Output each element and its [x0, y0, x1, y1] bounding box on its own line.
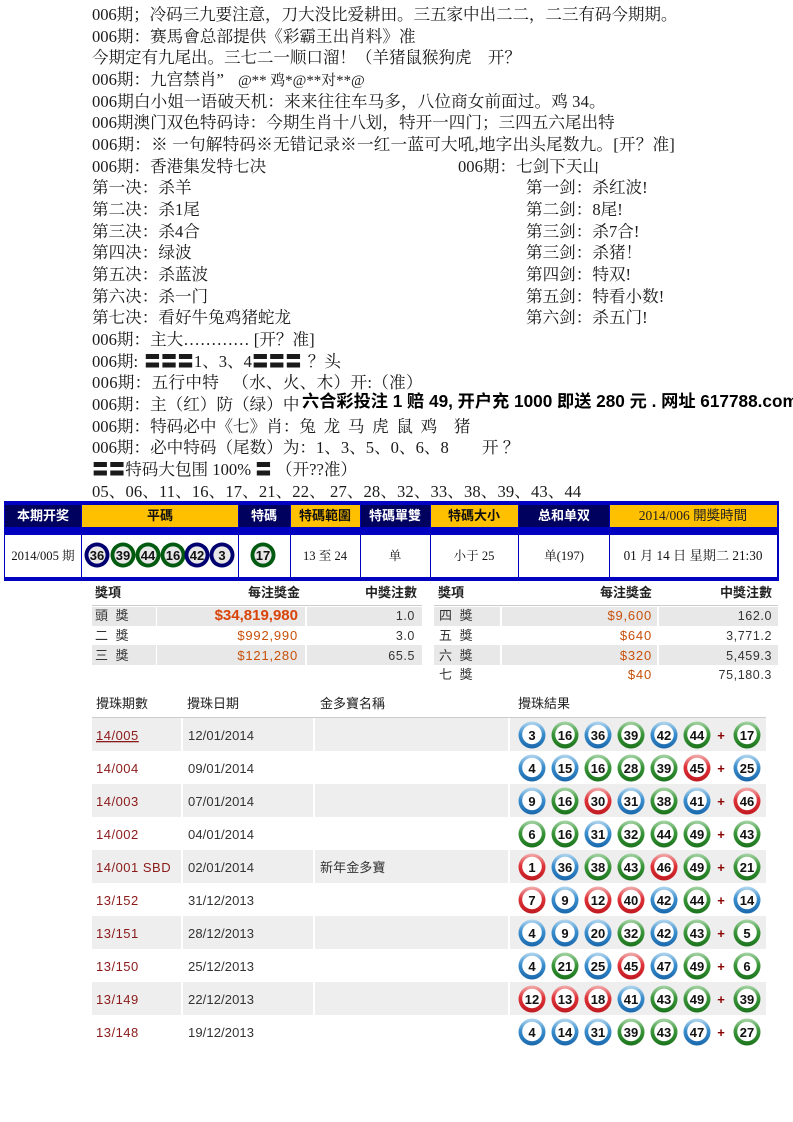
prize table left: 中獎注數 — [365, 585, 417, 600]
row 14/002: + — [717, 827, 725, 842]
row 14/001 SBD: 1 — [528, 860, 536, 875]
row 14/001 SBD: 21 — [740, 860, 754, 875]
row 13/151: 32 — [624, 926, 638, 941]
prize table right: 162.0 — [738, 609, 772, 623]
forecast text block — [92, 5, 677, 501]
row 14/002: 6 — [528, 827, 536, 842]
winning balls — [84, 542, 234, 568]
prize table left: 1.0 — [396, 609, 415, 623]
row 14/001 SBD: 49 — [690, 860, 704, 875]
row 13/149: 22/12/2013 — [188, 992, 254, 1007]
row 13/152: 7 — [528, 893, 536, 908]
prize table right: 五 獎 — [439, 628, 475, 643]
row 13/152: 40 — [624, 893, 638, 908]
prize table right: 5,459.3 — [726, 649, 772, 663]
prize table right: 每注獎金 — [600, 585, 652, 600]
row 14/005: 3 — [528, 728, 536, 743]
row 14/004: 4 — [528, 761, 536, 776]
prize table right: $9,600 — [607, 608, 652, 623]
draw results table — [4, 501, 779, 581]
history header: 攪珠日期 — [187, 696, 239, 711]
row 14/003: 46 — [740, 794, 754, 809]
prize table left — [92, 585, 422, 665]
row 13/151: 28/12/2013 — [188, 926, 254, 941]
forecast text block: 006期：主大………… [开？准] — [92, 330, 315, 349]
row 14/002: 44 — [657, 827, 672, 842]
row 14/002: 49 — [690, 827, 704, 842]
forecast text block: 第四剑：特双! — [526, 265, 631, 284]
row 14/004: 25 — [740, 761, 754, 776]
forecast text block: 第七决：看好牛兔鸡猪蛇龙 — [92, 308, 291, 327]
row 13/148: 43 — [657, 1025, 671, 1040]
row 13/152 — [96, 886, 760, 914]
table header row: 本期开奖 — [17, 505, 69, 524]
forecast text block: 006期澳门双色特码诗：今期生肖十八划，特开一四门；三四五六尾出特 — [92, 113, 615, 132]
prize table left: 3.0 — [396, 629, 415, 643]
prize table left: $121,280 — [237, 648, 298, 663]
row 13/151: 13/151 — [96, 926, 139, 941]
row 14/001 SBD: 36 — [558, 860, 572, 875]
row 14/005: 36 — [591, 728, 605, 743]
history header: 攪珠結果 — [518, 696, 570, 711]
row 14/004: 39 — [657, 761, 671, 776]
row 13/152: 42 — [657, 893, 671, 908]
row 13/150: 49 — [690, 959, 704, 974]
row 14/004: + — [717, 761, 725, 776]
row 14/003 — [96, 788, 760, 814]
forecast text block: 006期白小姐一语破天机：来来往往车马多，八位商女前面过。鸡 34。 — [92, 92, 606, 111]
forecast text block: 第三剑：杀猪！ — [526, 243, 642, 262]
forecast text block: 今期定有九尾出。三七二一顺口溜！（羊猪鼠猴狗虎 开？ — [92, 48, 521, 67]
row 14/004: 09/01/2014 — [188, 761, 254, 776]
prize table left: 頭 獎 — [95, 608, 131, 623]
row 14/003: 07/01/2014 — [188, 794, 254, 809]
forecast text block: 006期: 〓〓〓1、3、4〓〓〓 ？头 — [92, 352, 341, 371]
row 14/001 SBD: + — [717, 860, 725, 875]
forecast text block: 006期：九宫禁肖” @** 鸡*@**对**@ — [92, 70, 365, 89]
row 13/148: 39 — [624, 1025, 638, 1040]
row 14/004: 16 — [591, 761, 605, 776]
row 13/151: 20 — [591, 926, 605, 941]
row 13/148: 14 — [558, 1025, 573, 1040]
row 13/150: 4 — [528, 959, 536, 974]
row 13/152: + — [717, 893, 725, 908]
row 14/003: 30 — [591, 794, 605, 809]
row 13/150: + — [717, 959, 725, 974]
history header — [92, 696, 766, 718]
table header row — [5, 505, 777, 527]
table data row: 单 — [389, 549, 402, 563]
row 14/005: 14/005 — [96, 728, 139, 743]
row 13/152: 12 — [591, 893, 605, 908]
row 14/003: 31 — [624, 794, 638, 809]
row 13/149: 41 — [624, 992, 638, 1007]
row 13/151: 43 — [690, 926, 704, 941]
table header row: 总和单双 — [538, 505, 590, 524]
forecast text block: 006期：五行中特 （水、火、木）开:（准） — [92, 373, 423, 392]
row 13/150: 45 — [624, 959, 638, 974]
row 14/003: 9 — [528, 794, 536, 809]
row 13/150: 6 — [743, 959, 751, 974]
row 13/150: 25/12/2013 — [188, 959, 254, 974]
forecast text block: 第三剑：杀7合! — [526, 222, 639, 241]
row 13/148 — [96, 1018, 760, 1046]
row 14/004: 14/004 — [96, 761, 139, 776]
forecast text block: 第六决：杀一门 — [92, 287, 208, 306]
row 13/149: + — [717, 992, 725, 1007]
row 14/004: 45 — [690, 761, 704, 776]
row 14/005: 44 — [690, 728, 705, 743]
row 14/003: + — [717, 794, 725, 809]
forecast text block: 第四决：绿波 — [92, 243, 192, 262]
row 14/005: 17 — [740, 728, 754, 743]
prize table right: $40 — [628, 667, 652, 682]
row 14/005: 16 — [558, 728, 572, 743]
prize table left: 二 獎 — [95, 628, 131, 643]
forecast text block: 〓〓特码大包围 100% 〓 （开??准） — [92, 460, 357, 479]
row 13/152: 44 — [690, 893, 705, 908]
row 13/151: 42 — [657, 926, 671, 941]
table header row: 特碼大小 — [448, 505, 500, 524]
row 14/001 SBD: 14/001 SBD — [96, 860, 171, 875]
special ball: 17 — [256, 548, 270, 563]
table data row: 小于 25 — [454, 549, 494, 563]
prize table right — [434, 585, 778, 682]
row 13/152: 9 — [561, 893, 569, 908]
prize table left: 三 獎 — [95, 648, 131, 663]
forecast text block: 006期；冷码三九要注意，刀大没比爱耕田。三五家中出二二，二三有码今期期。 — [92, 5, 677, 24]
row 14/003: 16 — [558, 794, 572, 809]
row 14/005 — [96, 722, 760, 748]
table header row: 平碼 — [147, 505, 173, 524]
row 14/002: 16 — [558, 827, 572, 842]
row 13/149: 39 — [740, 992, 754, 1007]
prize table right: 六 獎 — [439, 648, 475, 663]
row 14/002: 43 — [740, 827, 754, 842]
row 14/005: 39 — [624, 728, 638, 743]
row 14/001 SBD: 新年金多寶 — [320, 860, 386, 875]
table header row: 特碼單雙 — [369, 505, 421, 524]
winning balls: 16 — [166, 548, 180, 563]
table data row: 2014/005 期 — [11, 549, 75, 563]
forecast text block: 第五决：杀蓝波 — [92, 265, 208, 284]
row 14/001 SBD: 38 — [591, 860, 605, 875]
row 13/150 — [96, 952, 760, 980]
forecast text block: 006期：必中特码（尾数）为：1、3、5、0、6、8 开 ？ — [92, 438, 519, 457]
row 13/149: 13 — [558, 992, 572, 1007]
forecast text block: 006期：特码必中《七》肖：兔 龙 马 虎 鼠 鸡 猪 — [92, 417, 470, 436]
prize table right: $640 — [620, 628, 652, 643]
table header row: 特碼 — [251, 505, 277, 524]
row 13/150: 13/150 — [96, 959, 139, 974]
winning balls: 44 — [141, 548, 156, 563]
row 14/004: 15 — [558, 761, 572, 776]
forecast text block: 第二决：杀1尾 — [92, 200, 200, 219]
draw history table — [92, 696, 766, 1046]
forecast text block: 006期：七剑下天山 — [458, 157, 599, 176]
row 13/149: 18 — [591, 992, 605, 1007]
table data row: 01 月 14 日 星期二 21:30 — [624, 548, 763, 563]
forecast text block: 第六剑：杀五门! — [526, 308, 648, 327]
prize table right: 七 獎 — [439, 667, 475, 682]
row 14/002: 31 — [591, 827, 605, 842]
table data row: 13 至 24 — [303, 549, 348, 563]
row 13/148: 4 — [528, 1025, 536, 1040]
row 14/001 SBD: 43 — [624, 860, 638, 875]
row 13/151 — [96, 920, 760, 946]
row 13/151: 9 — [561, 926, 569, 941]
forecast text block: 第二剑：8尾! — [526, 200, 623, 219]
table header row: 特碼範圍 — [299, 505, 351, 524]
prize table left: 獎項 — [95, 585, 121, 600]
forecast text block: 006期：香港集发特七决 — [92, 157, 266, 176]
row 14/005: + — [717, 728, 725, 743]
prize table right: 3,771.2 — [726, 629, 772, 643]
winning balls: 42 — [190, 548, 204, 563]
row 14/002: 04/01/2014 — [188, 827, 254, 842]
history header: 攪珠期數 — [96, 696, 148, 711]
prize table left: 65.5 — [388, 649, 415, 663]
row 13/148: 47 — [690, 1025, 704, 1040]
prize table right: 獎項 — [438, 585, 464, 600]
row 14/002: 14/002 — [96, 827, 139, 842]
row 13/150: 21 — [558, 959, 572, 974]
row 13/152: 13/152 — [96, 893, 139, 908]
row 14/003: 38 — [657, 794, 671, 809]
row 13/148: + — [717, 1025, 725, 1040]
prize table left: $34,819,980 — [215, 607, 298, 624]
winning balls: 39 — [116, 548, 130, 563]
row 14/004 — [96, 754, 760, 782]
prize table right: $320 — [620, 648, 652, 663]
forecast text block: 第三决：杀4合 — [92, 222, 200, 241]
prize table right: 75,180.3 — [719, 668, 772, 682]
row 14/003: 14/003 — [96, 794, 139, 809]
row 13/150: 25 — [591, 959, 605, 974]
row 13/149: 49 — [690, 992, 704, 1007]
row 14/005: 42 — [657, 728, 671, 743]
special ball — [250, 542, 276, 568]
row 13/149: 43 — [657, 992, 671, 1007]
row 13/148: 31 — [591, 1025, 605, 1040]
row 13/152: 31/12/2013 — [188, 893, 254, 908]
row 13/148: 13/148 — [96, 1025, 139, 1040]
table header row: 2014/006 開奬時間 — [639, 508, 747, 523]
row 13/149: 13/149 — [96, 992, 139, 1007]
row 14/001 SBD — [96, 854, 760, 880]
row 14/005: 12/01/2014 — [188, 728, 254, 743]
row 13/148: 19/12/2013 — [188, 1025, 254, 1040]
row 13/151: 4 — [528, 926, 536, 941]
row 14/003: 41 — [690, 794, 704, 809]
forecast text block: 第一决：杀羊 — [92, 178, 192, 197]
history header: 金多寶名稱 — [320, 696, 385, 711]
row 14/004: 28 — [624, 761, 638, 776]
row 13/150: 47 — [657, 959, 671, 974]
prize table left: $992,990 — [237, 628, 298, 643]
row 14/002: 32 — [624, 827, 638, 842]
winning balls: 3 — [218, 548, 226, 563]
forecast text block: 05、06、11、16、17、21、22、 27、28、32、33、38、39、43、44 — [92, 482, 581, 501]
advertisement banner text: 六合彩投注 1 赔 49, 开户充 1000 即送 280 元 . 网址 617788.com — [302, 391, 793, 411]
row 13/151: 5 — [743, 926, 751, 941]
row 13/149 — [96, 986, 760, 1012]
row 14/001 SBD: 46 — [657, 860, 671, 875]
row 13/151: + — [717, 926, 725, 941]
prize table right: 中獎注數 — [720, 585, 772, 600]
table data row — [5, 535, 777, 577]
winning balls: 36 — [90, 548, 104, 563]
forecast text block: 006期：赛馬會总部提供《彩霸王出肖料》准 — [92, 27, 416, 46]
forecast text block: 第一剑：杀红波! — [526, 178, 648, 197]
table data row: 单(197) — [544, 549, 584, 563]
row 13/148: 27 — [740, 1025, 754, 1040]
row 14/001 SBD: 02/01/2014 — [188, 860, 254, 875]
prize table right: 四 獎 — [439, 608, 475, 623]
row 14/002 — [96, 820, 760, 848]
row 13/152: 14 — [740, 893, 755, 908]
forecast text block: 第五剑：特看小数! — [526, 287, 664, 306]
forecast text block: 006期：主（红）防（绿）中 — [92, 395, 299, 414]
row 13/149: 12 — [525, 992, 539, 1007]
prize table left: 每注獎金 — [248, 585, 300, 600]
forecast text block: 006期：※ 一句解特码※无错记录※一红一蓝可大吼,地字出头尾数九。[开？准] — [92, 135, 675, 154]
